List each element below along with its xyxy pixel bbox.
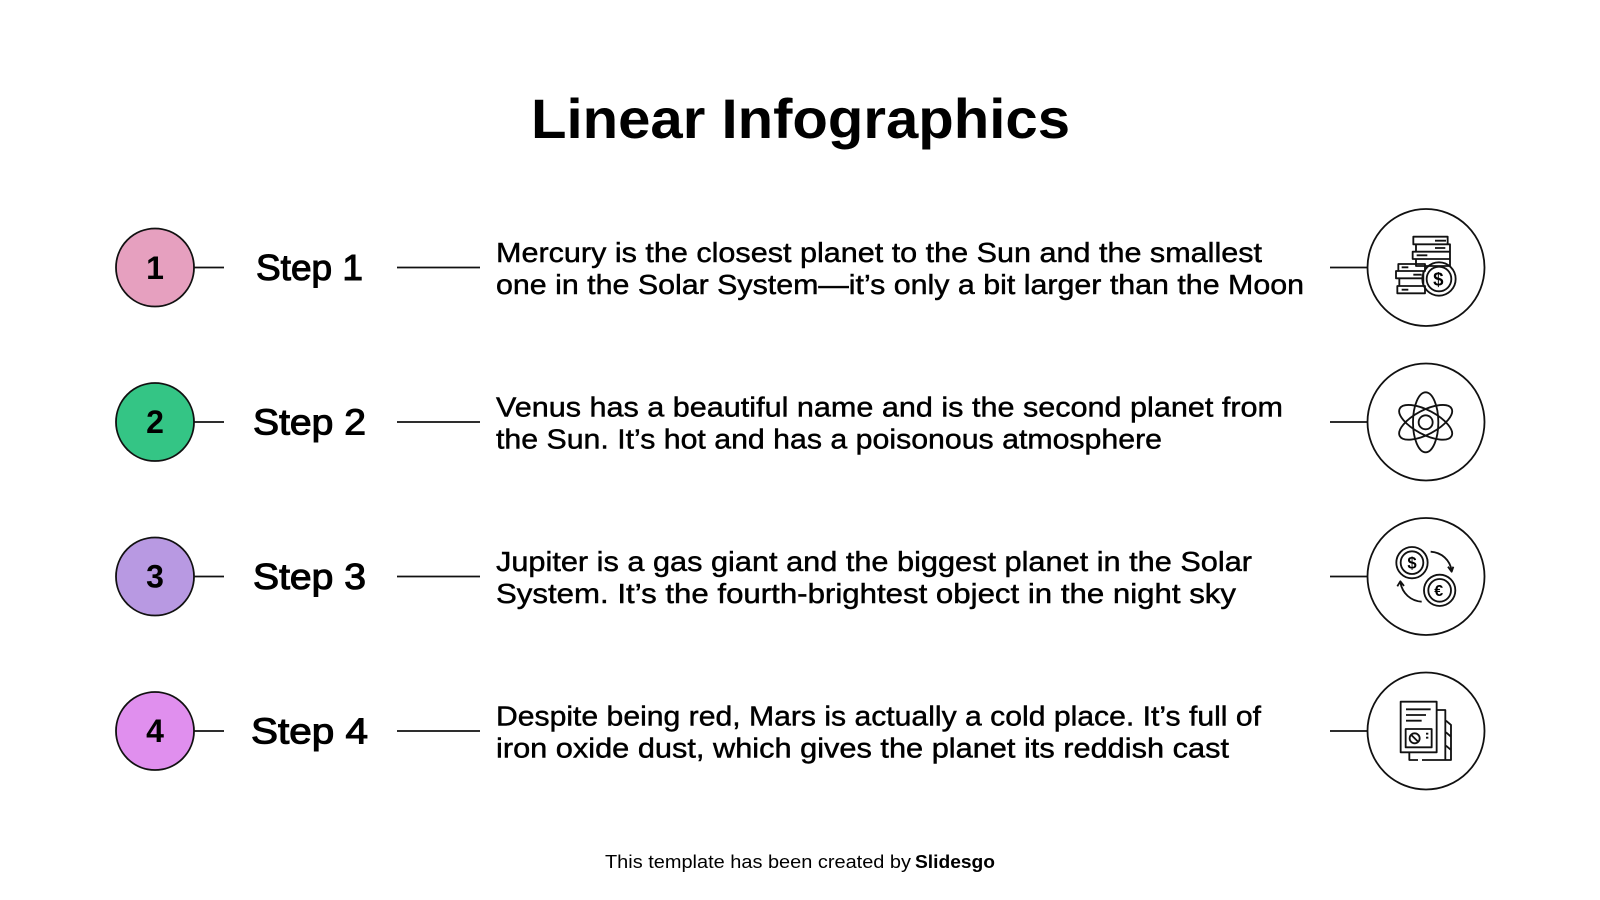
step label 3: Step 3 (253, 556, 366, 597)
icon: currency exchange: € (1434, 583, 1443, 600)
description 2: the Sun. It’s hot and has a poisonous atmosphere (496, 424, 1162, 454)
icon: coins stack: $ (1433, 269, 1444, 290)
connector: text to icon 1 (1330, 266, 1367, 268)
description 4: Despite being red, Mars is actually a cold place. It’s full of (496, 700, 1261, 732)
connector: badge to label 2 (194, 421, 224, 423)
step label 2: Step 2 (253, 402, 366, 442)
row: step 3 (116, 518, 1484, 635)
description 2 (496, 392, 1283, 454)
row: step 4 (116, 672, 1484, 790)
connector: badge to label 1 (194, 266, 224, 268)
icon: currency exchange (1396, 547, 1455, 606)
number badge 1 (116, 228, 194, 306)
connector: badge to label 3 (194, 576, 224, 578)
connector: text to icon 2 (1330, 421, 1367, 423)
step label 1: Step 1 (256, 247, 363, 288)
icon: coins stack (1396, 237, 1456, 296)
icon circle 2 (1368, 364, 1484, 480)
icon: documents (1401, 702, 1451, 760)
row: step 2 (116, 364, 1484, 480)
connector: text to icon 4 (1330, 730, 1367, 732)
number badge 4: 4 (146, 713, 164, 749)
number badge 2 (116, 383, 194, 461)
connector: text to icon 3 (1330, 576, 1367, 578)
number badge 3: 3 (146, 558, 164, 594)
icon circle 4 (1368, 672, 1484, 790)
footer credit: This template has been created by (605, 852, 911, 872)
description 4 (496, 700, 1261, 764)
description 3 (496, 546, 1252, 609)
icon: atom (1394, 392, 1457, 452)
description 3: Jupiter is a gas giant and the biggest planet in the Solar (496, 546, 1252, 577)
connector: label to text 4 (397, 730, 480, 732)
connector: badge to label 4 (194, 730, 224, 732)
number badge 1: 1 (146, 250, 164, 286)
icon: currency exchange: $ (1407, 554, 1417, 573)
description 1 (496, 237, 1304, 300)
step label 4: Step 4 (251, 710, 368, 752)
description 1: one in the Solar System—it’s only a bit larger than the Moon (496, 269, 1304, 300)
connector: label to text 3 (397, 576, 480, 578)
description 3: System. It’s the fourth-brightest object in the night sky (496, 578, 1236, 609)
number badge 3 (116, 538, 194, 616)
icon circle 3 (1368, 518, 1484, 635)
connector: label to text 1 (397, 266, 480, 268)
number badge 2: 2 (146, 404, 164, 440)
description 2: Venus has a beautiful name and is the second planet from (496, 392, 1283, 422)
connector: label to text 2 (397, 421, 480, 423)
description 1: Mercury is the closest planet to the Sun and the smallest (496, 237, 1262, 268)
footer credit: Slidesgo (915, 852, 995, 872)
description 4: iron oxide dust, which gives the planet its reddish cast (496, 732, 1229, 764)
row: step 1 (116, 209, 1484, 326)
title: Linear Infographics (531, 87, 1070, 150)
number badge 4 (116, 692, 194, 770)
icon circle 1 (1368, 209, 1484, 326)
